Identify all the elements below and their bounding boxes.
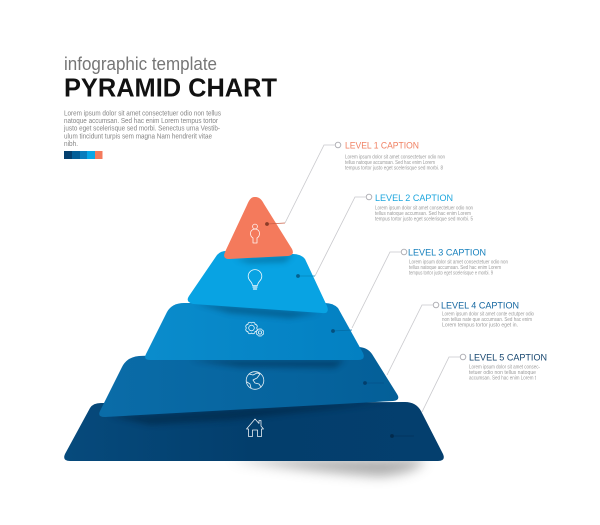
caption: level 1: LEVEL 1 CAPTION [345, 140, 419, 152]
title: PYRAMID CHART [64, 74, 277, 102]
caption: level 1 [345, 140, 445, 172]
intro text block: Lorem ipsum dolor sit amet consectetuer odio non tellus [64, 110, 221, 118]
caption: level 5: accumsan. Sed hac enim Lorem t [469, 376, 537, 382]
level 3 block [145, 303, 364, 360]
level 5 leader line [390, 354, 466, 438]
caption: level 3: Lorem ipsum dolor sit amet consectetuer odio non [409, 260, 508, 266]
caption: level 1: Lorem ipsum dolor sit amet consectetuer odio non [345, 154, 445, 160]
level 3 shadow on level 4 [190, 360, 345, 368]
level 2 leader line [296, 194, 372, 278]
caption: level 3: tempus tortor justo eget scelerisque e morbi. 9 [409, 270, 493, 276]
caption: level 3: LEVEL 3 CAPTION [408, 248, 486, 259]
level 4 leader line [363, 302, 439, 385]
icon: person [250, 224, 260, 243]
caption: level 4: Lorem ipsum dolor sit amet conte ectutper odio [442, 312, 534, 318]
caption: level 3 [408, 248, 508, 276]
level 1 block [224, 197, 293, 259]
caption: level 4 [441, 301, 534, 328]
icon: house [246, 419, 264, 436]
caption: level 2: LEVEL 2 CAPTION [375, 193, 453, 204]
level 3 leader line [331, 249, 407, 333]
intro text block: justo eget scelerisque sed morbi. Senectus urna Vestib- [63, 126, 221, 133]
caption: level 2: tempus tortor justo eget scelerisque sed morbi. 5 [375, 216, 473, 222]
caption: level 5: Lorem ipsum dolor sit amet consec- [469, 364, 540, 370]
caption: level 4: LEVEL 4 CAPTION [441, 301, 519, 312]
intro text block: ulum tincidunt turpis sem magna Nam hendrerit vitae [64, 133, 212, 140]
floor shadow [230, 459, 425, 476]
level 2 shadow on level 3 [195, 303, 320, 318]
level 1 leader line [265, 142, 341, 226]
caption: level 2: Lorem ipsum dolor sit amet consectetuer odio non [375, 206, 473, 212]
level 1 shadow on level 2 [235, 255, 293, 263]
level 4 shadow on level 5 [118, 403, 361, 426]
icon: gears [246, 322, 264, 336]
caption: level 1: tellus natoque accumsan. Sed hac enim Lorem [345, 160, 435, 166]
level 2 block [188, 251, 328, 313]
level 5 block [64, 402, 444, 461]
caption: level 3: tellus natoque accumsan. Sed hac enim Lorem [409, 265, 501, 271]
caption: level 5: tetuer odio non tellus natoque [469, 370, 536, 376]
level 4 block [99, 347, 398, 417]
caption: level 1: tempus tortor justo eget scelerisque sed morbi. 8 [345, 166, 443, 172]
caption: level 4: Lorem tempus tortor justo eget in. [442, 322, 518, 328]
icon: light bulb [248, 270, 262, 289]
icon: globe [246, 372, 264, 389]
intro text block [63, 110, 221, 148]
caption: level 5: LEVEL 5 CAPTION [469, 353, 547, 364]
caption: level 5 [469, 353, 547, 382]
caption: level 2 [375, 193, 473, 222]
intro text block: natoque accumsan. Sed hac enim Lorem tempus tortor [64, 118, 219, 125]
caption: level 4: non tellus nate que accumsan. Sed hac enim [442, 317, 532, 323]
caption: level 2: tellus natoque accumsan. Sed hac enim Lorem [375, 211, 471, 217]
subtitle: infographic template [64, 53, 217, 74]
intro text block: nibh. [64, 141, 78, 148]
colour swatches [64, 151, 102, 159]
